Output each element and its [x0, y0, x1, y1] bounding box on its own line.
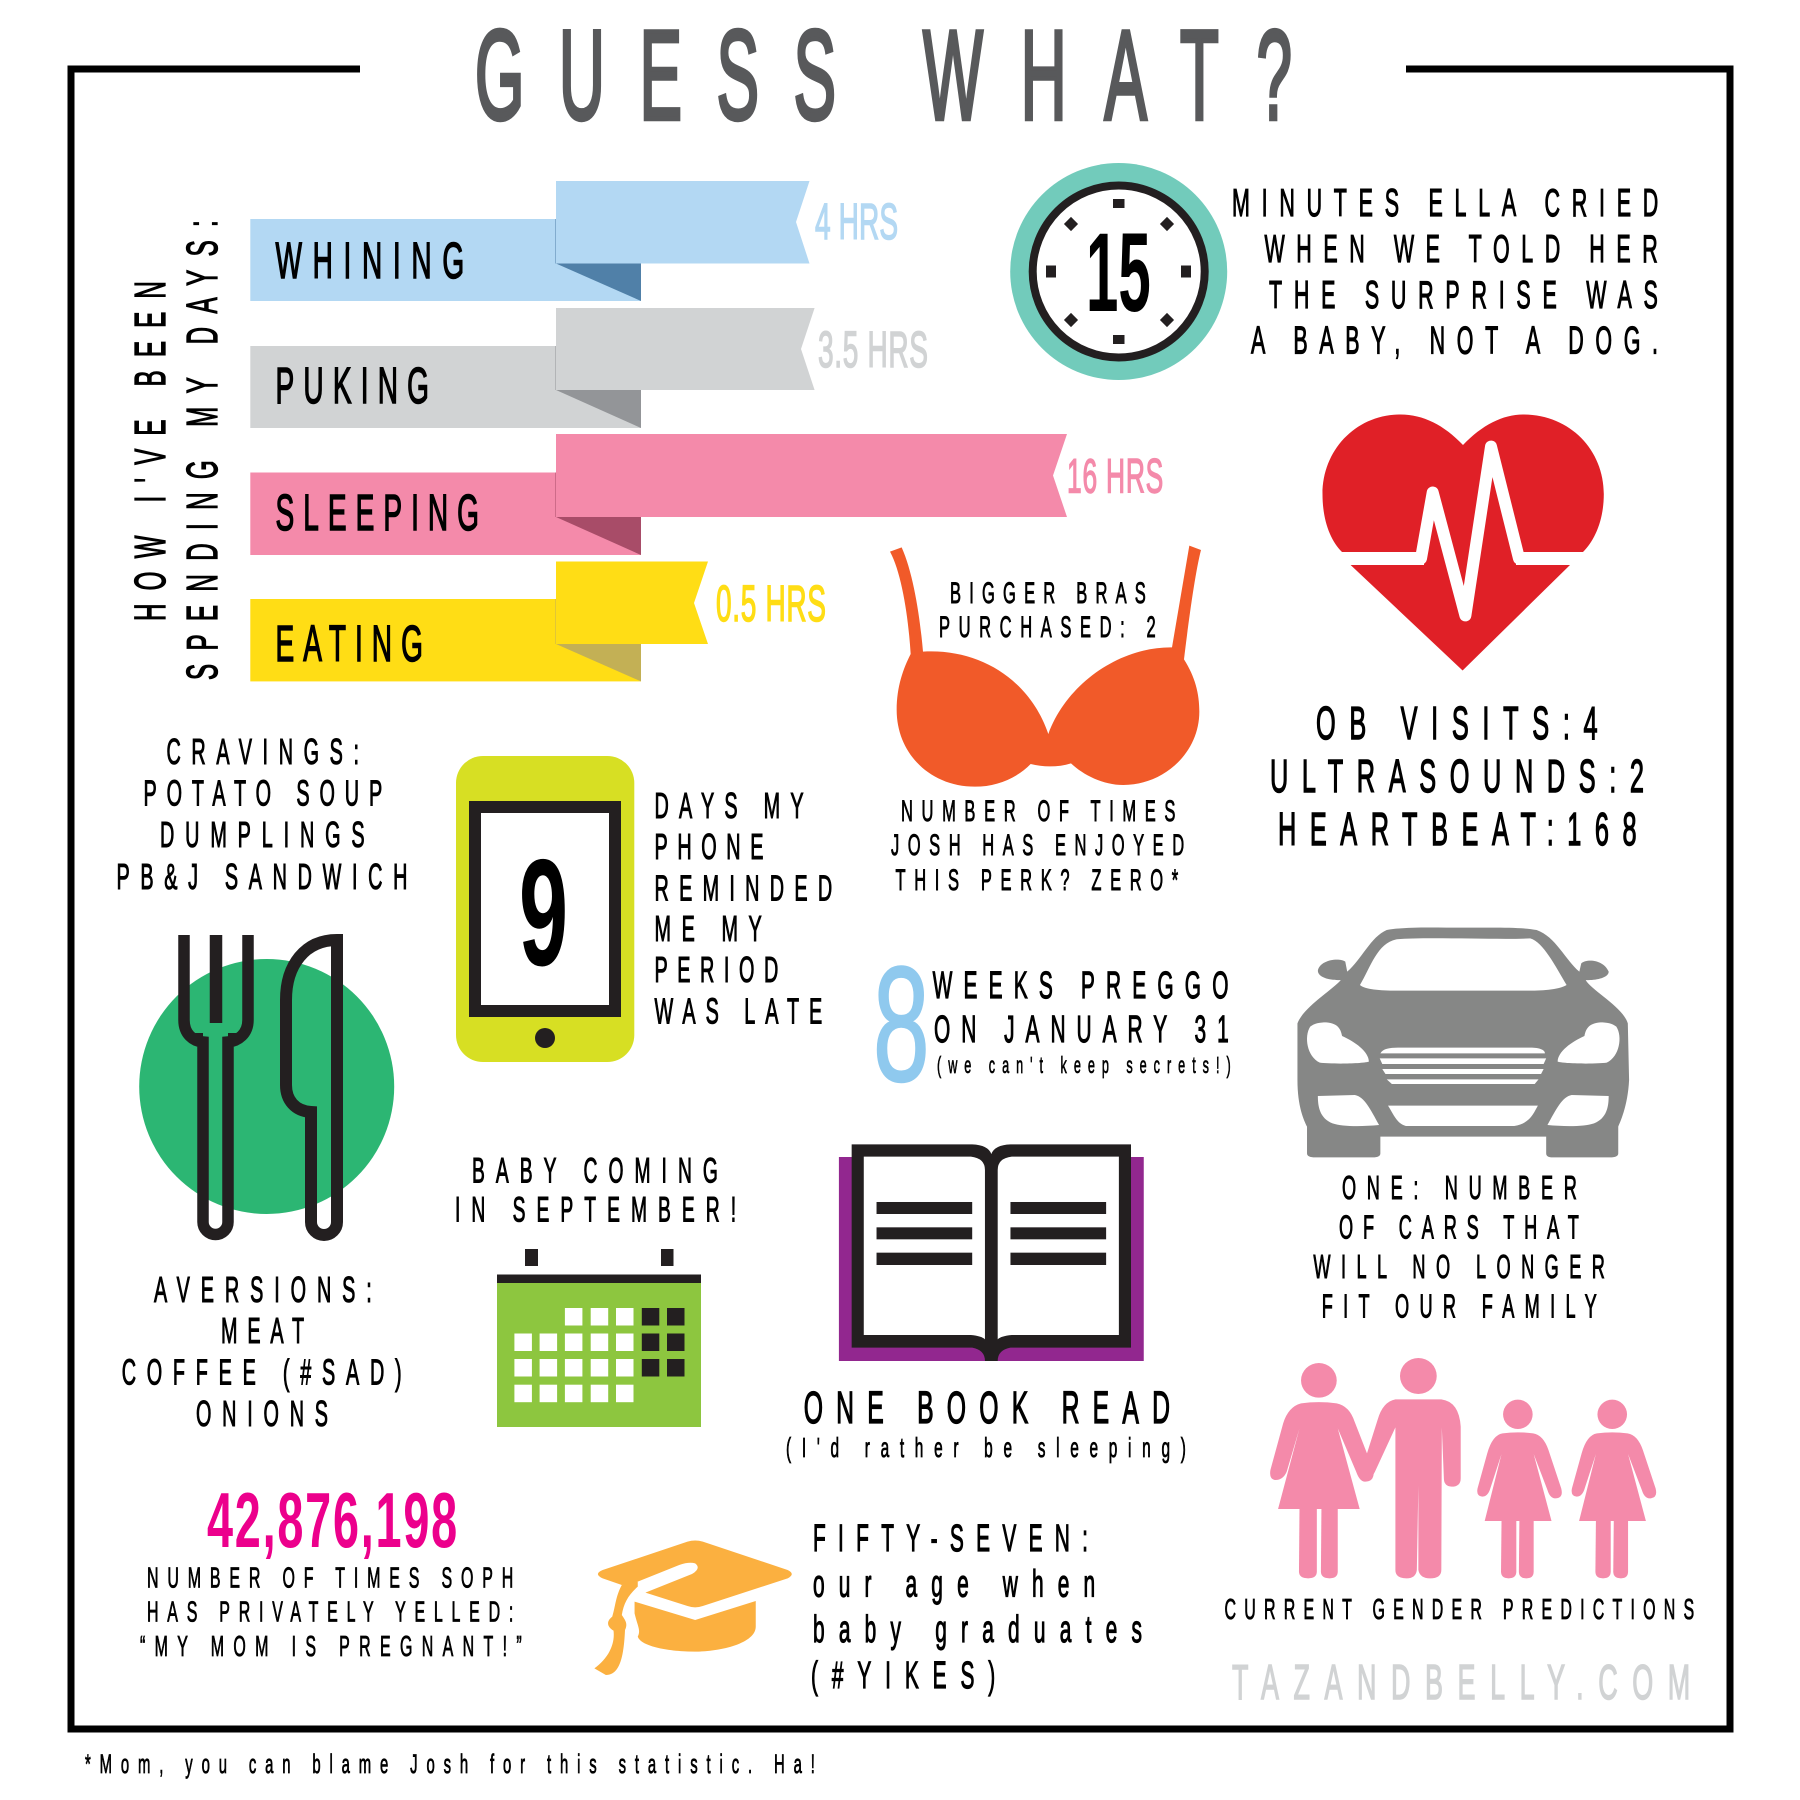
text: cravings [116, 733, 407, 898]
text: number of times Soph has yelled: HAS PRIVATELY YELLED: [147, 1596, 513, 1628]
text: bigger bras purchased: PURCHASED: 2 [939, 611, 1156, 644]
icon: family of four [1270, 1358, 1656, 1578]
text: aversions: COFFEE (#SAD) [122, 1354, 402, 1393]
text: one number of cars: WILL NO LONGER [1313, 1248, 1605, 1285]
text: minutes Ella cried [1232, 181, 1658, 362]
text: bigger bras purchased [939, 577, 1156, 644]
text: cravings: PB&J SANDWICH [116, 858, 407, 898]
text: days my phone reminded me: PHONE [654, 828, 763, 868]
text: 8 weeks preggo: 8 [873, 932, 930, 1116]
chart heading: how I've been spending my days: HOW I'VE BEEN [125, 281, 175, 621]
text: one number of cars: FIT OUR FAMILY [1322, 1288, 1597, 1325]
text: one book read [786, 1382, 1186, 1463]
ribbon bar: whining [250, 181, 898, 301]
text: one number of cars: OF CARS THAT [1339, 1209, 1579, 1246]
text: bigger bras purchased: BIGGER BRAS [950, 577, 1146, 610]
text: one book read: ONE BOOK READ [804, 1382, 1170, 1433]
text: baby coming in September: BABY COMING [472, 1150, 718, 1190]
text: number of times Josh has enjoyed this perk: THIS PERK? ZERO* [896, 864, 1179, 897]
ribbon bar: eating: EATING [276, 615, 423, 672]
ribbon bar: eating: 0.5 HRS [716, 575, 826, 632]
text: current gender predictions: CURRENT GENDER PREDICTIONS [1224, 1593, 1694, 1625]
ribbon bar: puking: 3.5 HRS [818, 321, 928, 378]
text: baby coming in September: IN SEPTEMBER! [455, 1189, 736, 1229]
icon: bra [890, 546, 1201, 787]
text: number of times Soph has yelled [140, 1562, 522, 1662]
text: cravings: DUMPLINGS [160, 816, 365, 856]
footnote: *Mom, you can blame Josh for this statistic. Ha! [85, 1748, 815, 1779]
text: fifty-seven: FIFTY-SEVEN: [813, 1518, 1088, 1560]
text: one book read: (I'd rather be sleeping) [786, 1432, 1186, 1463]
text: days my phone reminded me: DAYS MY [654, 787, 804, 827]
text: 8 weeks preggo: ON JANUARY 31 [934, 1009, 1229, 1051]
text: OB visits, ultrasounds, heartbeat: HEARTBEAT:168 [1278, 803, 1637, 855]
text: cravings: CRAVINGS: [166, 733, 359, 773]
ribbon bar: puking [250, 308, 928, 428]
text: cravings: POTATO SOUP [144, 775, 382, 814]
text: 8 weeks preggo [873, 932, 1231, 1116]
text: one number of cars [1313, 1169, 1605, 1325]
icon: plate with fork and knife [139, 935, 394, 1235]
ribbon bar: sleeping: SLEEPING [276, 484, 479, 541]
ribbon bar: whining: WHINING [276, 232, 464, 289]
text: number of times Soph has yelled: NUMBER OF TIMES SOPH [147, 1562, 513, 1594]
text: 8 weeks preggo: (we can't keep secrets!) [937, 1052, 1231, 1078]
chart heading: how I've been spending my days: SPENDING MY DAYS: [177, 220, 227, 680]
big number: 42,876,198: 42,876,198 [207, 1477, 457, 1564]
text: website credit: TAZANDBELLY.COM [1232, 1656, 1690, 1710]
text: fifty-seven: baby graduates [813, 1609, 1142, 1651]
icon: graduation cap [594, 1540, 792, 1675]
icon: clock showing 15: 15 [1086, 209, 1151, 335]
text: one number of cars: ONE: NUMBER [1342, 1169, 1577, 1206]
text: OB visits, ultrasounds, heartbeat [1270, 697, 1644, 855]
text: number of times Josh has enjoyed this perk: NUMBER OF TIMES [901, 795, 1175, 828]
title [475, 5, 1292, 147]
title: WHAT? [923, 5, 1292, 147]
ribbon bar: sleeping: 16 HRS [1067, 450, 1163, 504]
ribbon bar: whining: 4 HRS [815, 193, 898, 250]
text: aversions: MEAT [221, 1312, 304, 1352]
text: number of times Josh has enjoyed this perk: JOSH HAS ENJOYED [891, 829, 1184, 862]
text: minutes Ella cried: A BABY, NOT A DOG. [1251, 319, 1658, 362]
icon: phone showing 9: 9 [519, 829, 568, 998]
text: baby coming in September [455, 1150, 736, 1229]
text: fifty-seven [811, 1518, 1142, 1697]
chart heading: how I've been spending my days [125, 220, 227, 680]
text: minutes Ella cried: THE SURPRISE WAS [1269, 273, 1658, 317]
text: aversions [122, 1271, 402, 1435]
text: number of times Soph has yelled: “MY MOM IS PREGNANT!” [140, 1630, 522, 1662]
ribbon bar: puking: PUKING [276, 357, 429, 414]
text: 8 weeks preggo: WEEKS PREGGO [933, 965, 1228, 1007]
text: days my phone reminded me: REMINDED [654, 870, 832, 909]
text: number of times Josh has enjoyed this perk [891, 795, 1184, 897]
icon: open book [839, 1144, 1144, 1361]
text: OB visits, ultrasounds, heartbeat: ULTRASOUNDS:2 [1270, 750, 1644, 802]
text: aversions: ONIONS [196, 1395, 328, 1435]
text: OB visits, ultrasounds, heartbeat: OB VISITS:4 [1316, 697, 1598, 749]
text: days my phone reminded me [654, 787, 832, 1032]
text: days my phone reminded me: ME MY [654, 910, 762, 950]
title: GUESS [475, 5, 836, 147]
ribbon bar: sleeping [250, 434, 1163, 555]
icon: calendar [497, 1249, 701, 1427]
text: days my phone reminded me: PERIOD [654, 951, 778, 991]
text: minutes Ella cried: MINUTES ELLA CRIED [1232, 181, 1658, 225]
text: aversions: AVERSIONS: [154, 1271, 372, 1311]
icon: phone showing 9 [456, 756, 634, 1062]
ribbon bar: eating [250, 562, 826, 681]
icon: heart with heartbeat line [1322, 414, 1604, 670]
icon: car [1297, 928, 1629, 1157]
icon: clock showing 15 [1010, 163, 1227, 380]
text: fifty-seven: our age when [813, 1563, 1095, 1605]
text: days my phone reminded me: WAS LATE [654, 993, 822, 1032]
text: minutes Ella cried: WHEN WE TOLD HER [1264, 227, 1658, 271]
text: fifty-seven: (#YIKES) [811, 1655, 995, 1697]
